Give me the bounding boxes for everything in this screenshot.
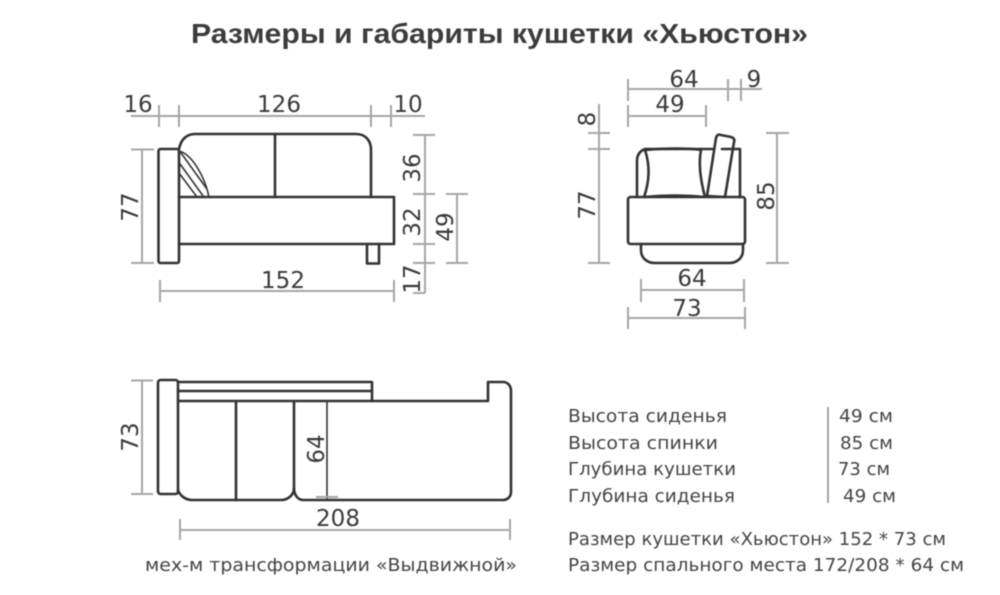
dimension 64: 64 [677,266,707,292]
dimensions 8 and 77: 8 [575,112,601,126]
dimension 73 [628,296,745,329]
dimension 85 [754,133,789,263]
panel: front view [575,67,789,329]
dimension 77 [118,149,154,263]
spec values: 73 см [838,460,890,480]
panel: side view [118,92,468,302]
sofa side drawing [158,134,394,264]
dimension 152: 152 [261,268,305,294]
dimension 73: 73 [118,422,144,452]
dimension 73 [118,380,153,494]
sofa bed drawing [158,380,511,500]
height dimensions 36, 32, 17: 17 [400,264,426,294]
spec labels: Глубина кушетки [568,460,736,480]
size summary [568,530,964,576]
spec labels: Глубина сиденья [568,487,735,507]
dimension 49 [433,194,468,263]
sofa front drawing [628,135,745,263]
height dimensions 36, 32, 17: 32 [400,207,426,237]
spec values: 85 см [840,434,893,454]
dimension 152 [160,268,394,302]
top dimensions 64, 9 [628,67,762,101]
spec values: 49 см [839,407,893,427]
top dimensions 64, 9: 64 [669,67,699,93]
dimensions 8 and 77: 77 [575,190,601,220]
top dimensions 16, 126, 10: 10 [393,92,423,118]
dimension 208: 208 [316,506,360,532]
top dimensions 16, 126, 10: 126 [257,92,301,118]
dimension 49: 49 [433,212,459,242]
spec labels: Высота спинки [568,434,718,454]
top dimensions 64, 9: 9 [747,67,761,93]
spec values [838,407,896,507]
top dimensions 16, 126, 10 [123,92,425,127]
dimension 49 [628,92,706,127]
panel: unfolded view [118,380,517,576]
height dimensions 36, 32, 17 [400,135,435,294]
top dimensions 16, 126, 10: 16 [123,92,153,118]
size summary: Размер кушетки «Хьюстон» 152 * 73 см [568,530,946,550]
spec divider [827,407,829,503]
panel: specifications [568,407,964,576]
spec labels [568,407,736,507]
dimension 73: 73 [672,296,702,322]
title: Размеры и габариты кушетки «Хьюстон» [191,18,808,49]
height dimensions 36, 32, 17: 36 [400,153,426,183]
dimension 77: 77 [118,192,144,222]
caption: mechanism: мех-м трансформации «Выдвижной» [145,556,517,576]
size summary: Размер спального места 172/208 * 64 см [568,556,964,576]
spec labels: Высота сиденья [568,407,727,427]
dimension 64 [641,266,744,302]
dimensions 8 and 77 [575,104,610,263]
dimension 64: 64 [304,434,330,464]
dimension 208 [180,506,510,540]
spec values: 49 см [843,487,896,507]
dimension 49: 49 [655,92,685,118]
dimension 85: 85 [754,181,780,211]
